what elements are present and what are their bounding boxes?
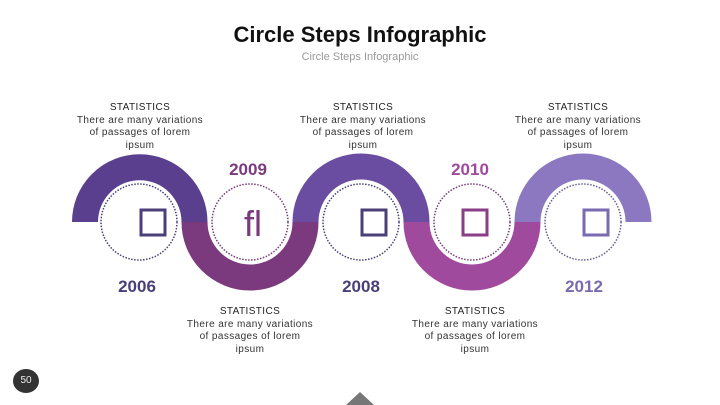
- text: STATISTICS: [445, 306, 505, 317]
- page number: 50: [20, 375, 32, 386]
- text: 2008: [342, 277, 380, 296]
- text: STATISTICS: [220, 306, 280, 317]
- title: Circle Steps Infographic: [233, 22, 487, 47]
- page number: [13, 369, 39, 393]
- text: STATISTICS: [548, 102, 608, 113]
- text: 2006: [118, 277, 156, 296]
- years: 2009: [229, 160, 267, 179]
- wave timeline: fl: [244, 203, 262, 244]
- text: There are many variations of passages of lorem ipsum: [187, 318, 313, 354]
- text: 2010: [451, 160, 489, 179]
- text: There are many variations of passages of lorem ipsum: [412, 318, 538, 354]
- text: 2012: [565, 277, 603, 296]
- text: There are many variations of passages of lorem ipsum: [300, 114, 426, 150]
- text blocks: There are many variations of passages of lorem ipsum: [77, 114, 203, 150]
- triangle: [346, 392, 374, 405]
- text: STATISTICS: [333, 102, 393, 113]
- subtitle: Circle Steps Infographic: [302, 51, 418, 63]
- text: There are many variations of passages of lorem ipsum: [515, 114, 641, 150]
- text blocks: STATISTICS: [110, 102, 170, 113]
